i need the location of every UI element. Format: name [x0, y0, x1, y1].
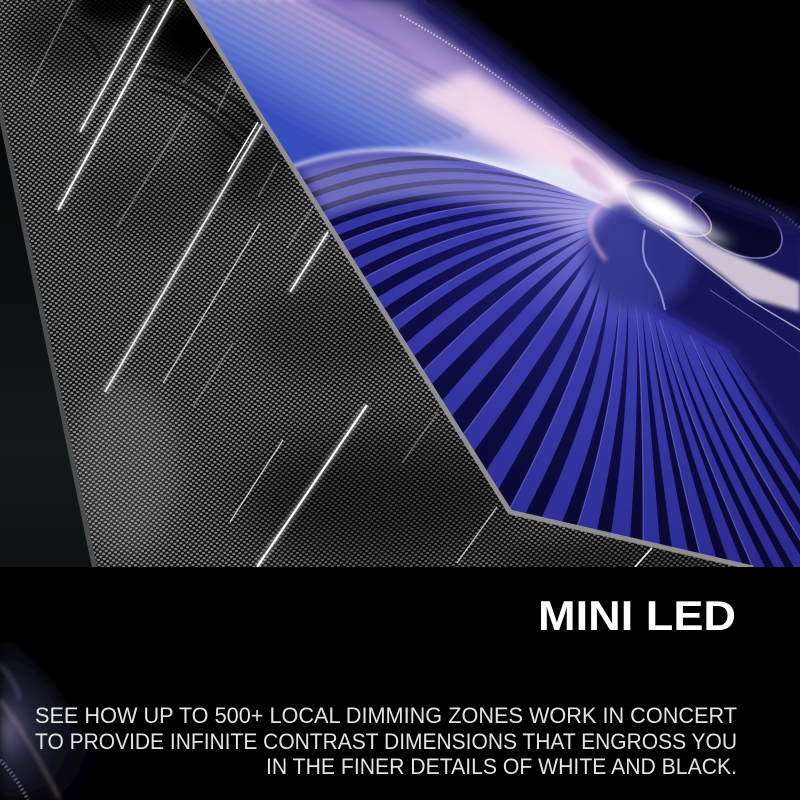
body text	[35, 703, 737, 779]
dark disc with rim	[691, 192, 782, 258]
white arc	[292, 150, 612, 208]
shading on dot matrix	[0, 0, 734, 567]
dark blue region right of the ribs	[640, 190, 800, 470]
rib highlights	[340, 203, 800, 568]
pale pink glow bands	[340, 0, 640, 205]
panel: LED dot-matrix side	[0, 0, 800, 580]
soft dark blue halo around image edge	[425, 0, 800, 225]
body text: IN THE FINER DETAILS OF WHITE AND BLACK.	[266, 754, 737, 779]
panel frame edges	[0, 0, 753, 570]
rib field	[296, 151, 800, 567]
stripes in upper blue area	[188, 0, 470, 168]
soft dark outer edge	[425, 0, 800, 225]
bright light streaks	[58, 0, 652, 567]
decorative glow bottom left	[0, 630, 120, 800]
faint outer rings above disc	[730, 186, 800, 228]
swirl disc	[532, 117, 793, 310]
dark left backdrop	[0, 100, 100, 567]
pale sheen on ribs near the arc	[300, 152, 612, 240]
bright central streak	[590, 165, 800, 352]
body text: SEE HOW UP TO 500+ LOCAL DIMMING ZONES WORK IN CONCERT	[35, 703, 737, 728]
panel: colour image side	[190, 0, 800, 567]
rib shadow gaps	[303, 156, 800, 569]
dim light streaks	[30, 0, 438, 463]
body text: TO PROVIDE INFINITE CONTRAST DIMENSIONS THAT ENGROSS YOU	[35, 729, 737, 754]
title: MINI LED	[538, 592, 736, 639]
top fine line detail	[400, 15, 590, 150]
moire arcs on dot matrix	[60, 20, 262, 150]
bottom black text strip	[0, 567, 800, 800]
